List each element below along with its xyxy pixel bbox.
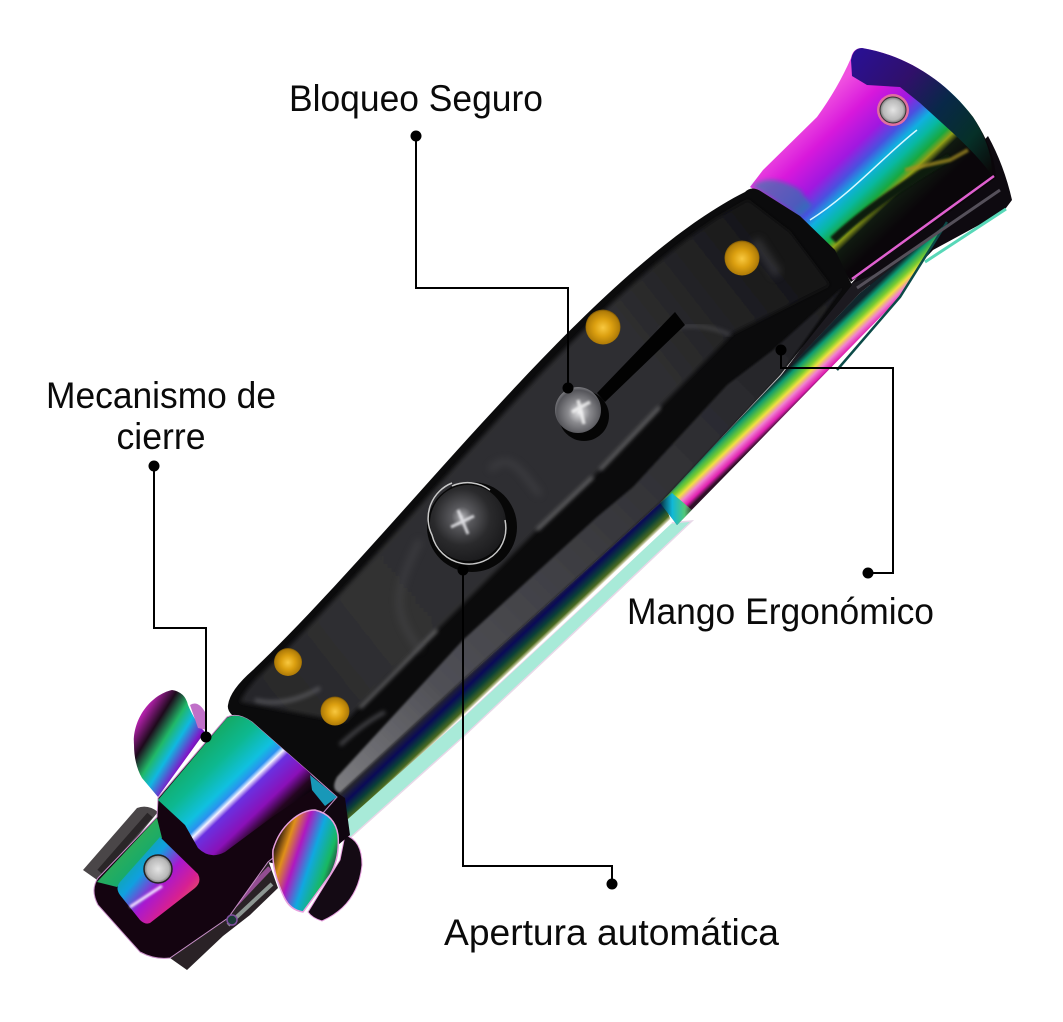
rivet: top bolster (877, 94, 909, 126)
lower rear disc (308, 835, 362, 921)
slot (597, 312, 685, 402)
rivet: bottom plate (144, 855, 172, 883)
button: automatic opening (427, 482, 517, 572)
bottom bolster (83, 690, 362, 970)
green end panel (97, 818, 162, 887)
mint blade edge (338, 521, 692, 838)
dark liner above rainbow (780, 225, 945, 377)
rivets: handle (274, 240, 760, 726)
back spring (850, 136, 1012, 285)
colour band (158, 716, 320, 855)
dark cap rim (851, 48, 992, 176)
rainbow blade section (660, 223, 947, 525)
lock disc (83, 807, 158, 882)
label: Mecanismo de cierre: Mecanismo de (46, 375, 276, 416)
callout: Mango Ergonómico (627, 344, 934, 632)
leader line (463, 570, 612, 884)
neck joining bolster and blade (268, 775, 350, 870)
leader line (781, 350, 893, 573)
callout: Bloqueo Seguro (289, 78, 574, 394)
label: Bloqueo Seguro: Bloqueo Seguro (289, 78, 543, 119)
lower lobe (273, 810, 338, 912)
lower strip (170, 860, 278, 970)
callout: Mecanismo de cierre (46, 375, 276, 742)
black handle (228, 188, 852, 794)
button: safety lock (555, 387, 609, 441)
handle face (240, 200, 830, 722)
lock plate (118, 837, 199, 924)
callout: Apertura automática (444, 564, 779, 953)
label: Apertura automática: Apertura automática (444, 912, 779, 953)
top bolster (750, 48, 996, 282)
label: Mango Ergonómico: Mango Ergonómico (627, 591, 934, 632)
knife illustration (83, 48, 1012, 970)
leader line (416, 136, 568, 388)
ridge highlight (360, 407, 660, 708)
bevel band (334, 287, 843, 793)
blade (336, 190, 1006, 838)
callout: Mecanismo de cierre: cierre (116, 416, 206, 457)
leader line (154, 466, 206, 737)
main body (94, 715, 337, 958)
dark stripe (336, 500, 672, 826)
upper lobe (134, 690, 205, 797)
